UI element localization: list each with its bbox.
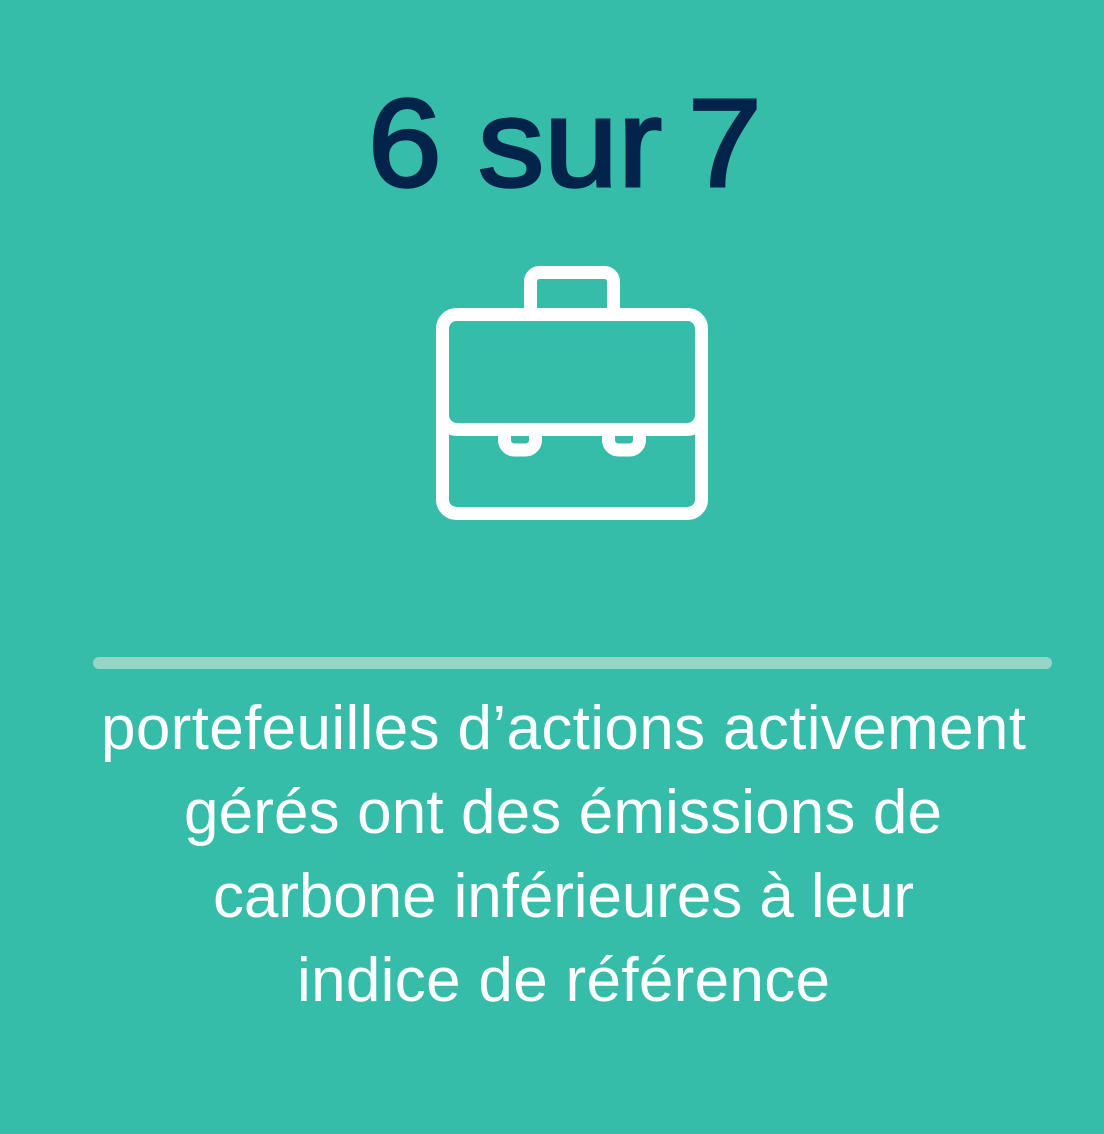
text block: description: portefeuilles d’actions activement [101, 694, 1026, 763]
title: 6 sur 7: 6 [368, 73, 442, 213]
icon: briefcase [442, 272, 702, 514]
text block: description: indice de référence [297, 946, 830, 1015]
title: 6 sur 7 [368, 73, 762, 213]
title: 6 sur 7: sur [478, 73, 662, 213]
divider rule [93, 657, 1052, 669]
title: 6 sur 7: 7 [688, 73, 762, 213]
text block: description [101, 694, 1026, 1015]
text block: description: carbone inférieures à leur [213, 862, 914, 931]
text block: description: gérés ont des émissions de [184, 778, 942, 847]
